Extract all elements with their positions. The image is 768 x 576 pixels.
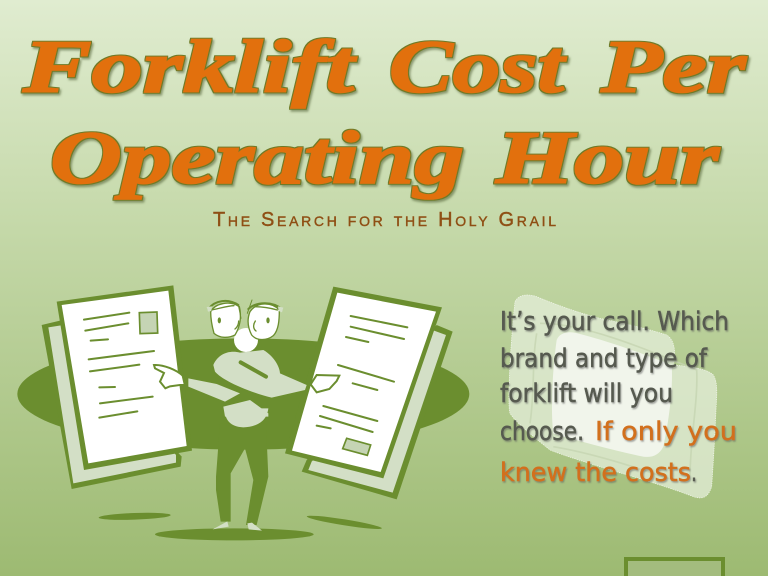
shoes [213, 521, 262, 531]
right document text lines [317, 316, 407, 432]
right document stack [285, 287, 453, 499]
callout text: If only you [595, 417, 737, 447]
torso and right-pointing arm [213, 350, 307, 398]
callout text: . [691, 458, 697, 488]
lower torso [224, 408, 268, 427]
left document stack [42, 285, 192, 489]
callout text: knew the costs [500, 458, 691, 488]
man upper body [154, 300, 339, 417]
arm crease [241, 362, 266, 377]
title: Hour [495, 117, 720, 200]
left document text lines [84, 313, 154, 418]
blob contour lines [530, 323, 697, 480]
callout text: forklift will you [500, 379, 673, 409]
callout text: brand and type of [500, 344, 708, 374]
left-pointing forearm [188, 378, 240, 402]
title: Per [600, 26, 747, 109]
man legs [213, 408, 268, 531]
callout text: choose. [500, 417, 584, 447]
floor shadows [99, 512, 382, 540]
neck [234, 328, 258, 352]
illustration: man comparing two documents [17, 285, 469, 540]
title: Operating [50, 117, 464, 200]
subtitle: The Search for the Holy Grail [213, 209, 556, 231]
title: Cost [389, 26, 567, 109]
title: Forklift [22, 26, 357, 109]
bottom-right button box [626, 559, 723, 576]
left head [211, 303, 240, 337]
green ellipse backdrop [17, 338, 469, 450]
right hand [311, 375, 339, 392]
lower torso top [223, 400, 268, 417]
left hand [154, 365, 185, 388]
title [22, 26, 747, 200]
left document picture box [139, 312, 158, 334]
callout text: It’s your call. Which [500, 307, 729, 337]
callout text [500, 307, 737, 488]
hair bands and faces [208, 300, 282, 331]
callout blob [509, 295, 717, 498]
right document picture box [343, 438, 371, 455]
right head [248, 304, 279, 340]
